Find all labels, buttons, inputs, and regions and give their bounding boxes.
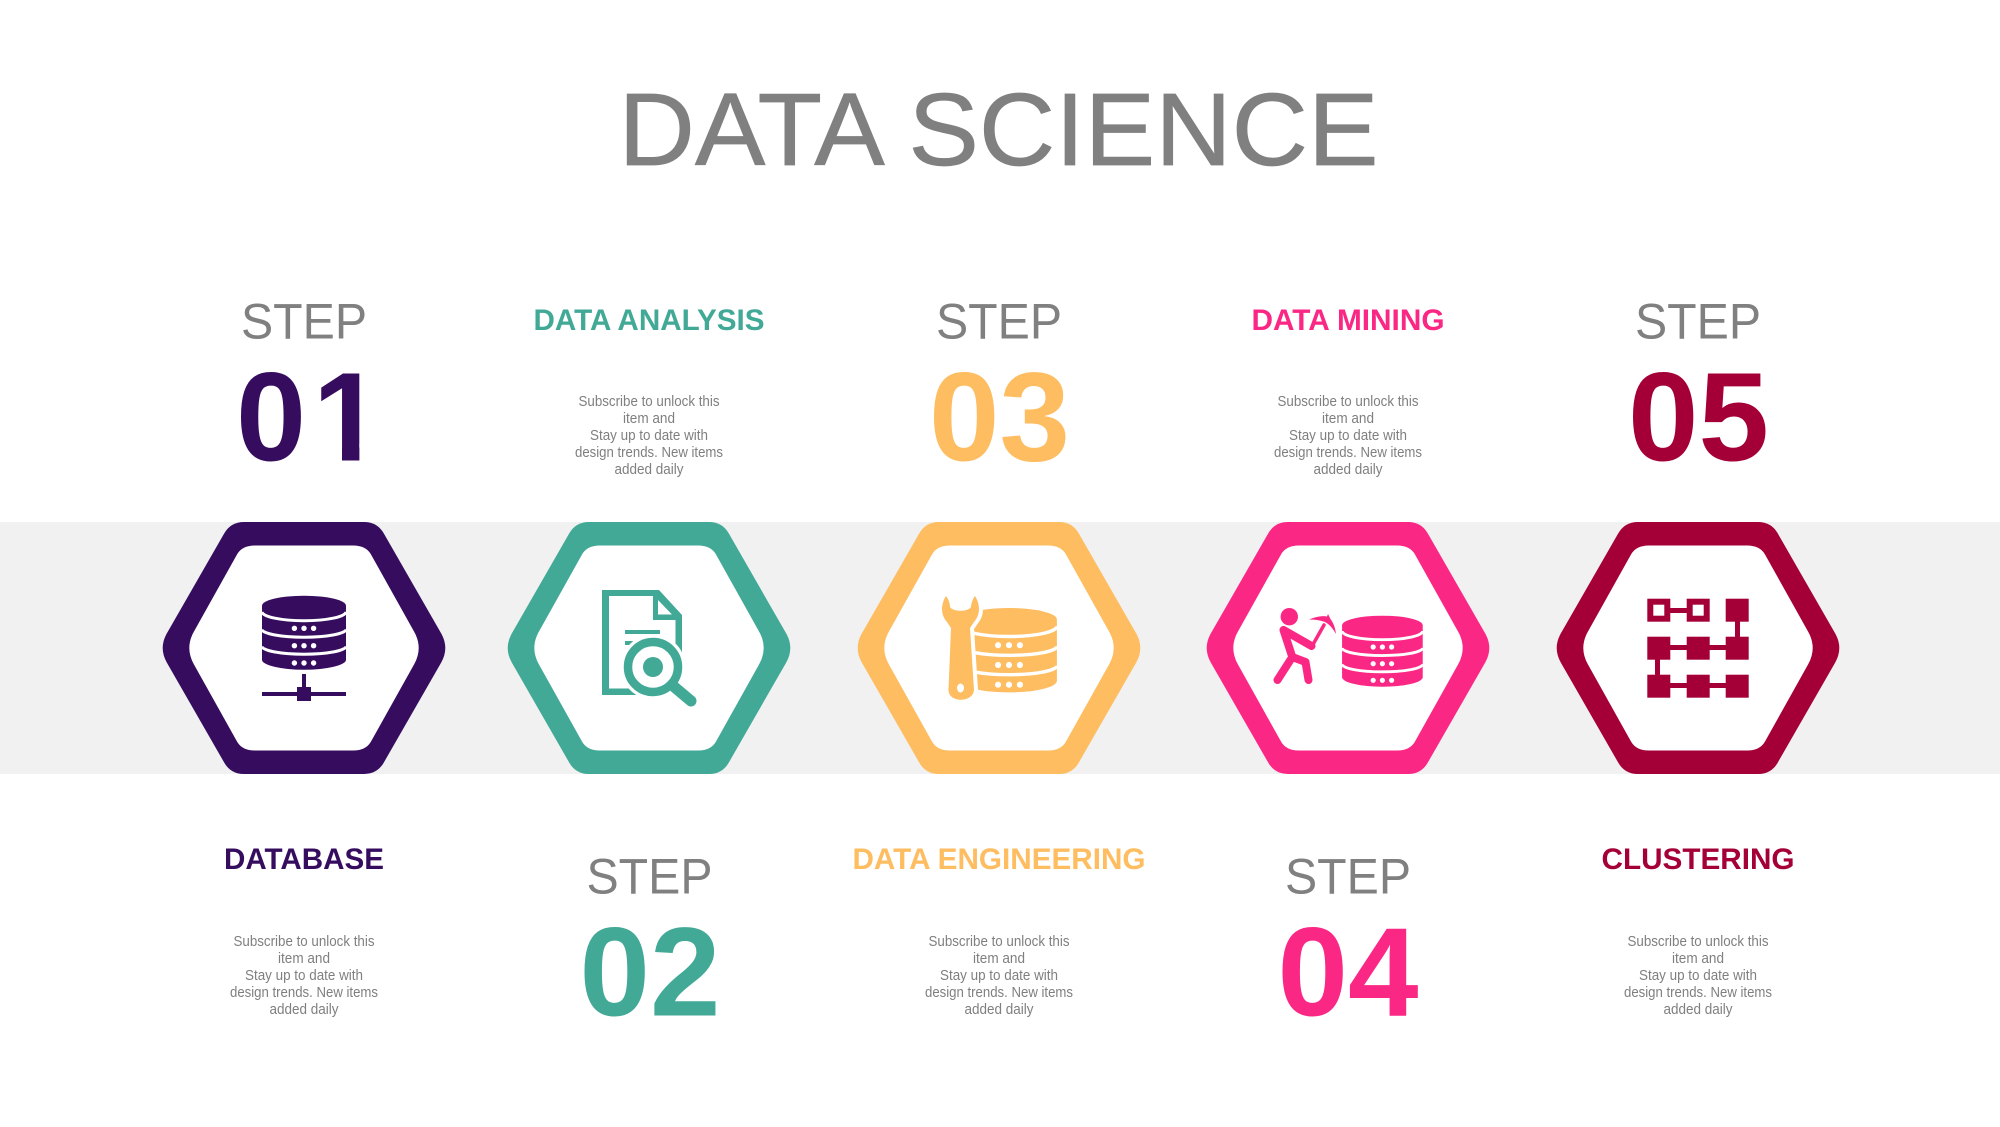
text block: data engineering: item and: [973, 950, 1025, 967]
text block: data engineering: design trends. New items: [925, 984, 1073, 1001]
icon: database network: [262, 596, 346, 701]
text block: clustering: design trends. New items: [1624, 984, 1772, 1001]
text block: data analysis: item and: [623, 410, 675, 427]
icon: document with magnifier: [602, 590, 691, 701]
text block: data mining: added daily: [1314, 461, 1383, 478]
text block: data mining: design trends. New items: [1274, 444, 1422, 461]
step label 05: STEP: [1635, 294, 1761, 350]
hexagon 1: [163, 522, 445, 774]
grey band: [0, 522, 2000, 774]
panel: step 03 data engineering: [852, 294, 1146, 1018]
step label 04: STEP: [1285, 848, 1411, 904]
text block: clustering: [1624, 933, 1772, 1018]
heading: data mining: DATA MINING: [1252, 304, 1444, 337]
step label 02: STEP: [586, 848, 712, 904]
text block: data mining: item and: [1322, 410, 1374, 427]
step number 01: 0: [236, 346, 306, 488]
text block: data engineering: [925, 933, 1073, 1018]
heading: data analysis: DATA ANALYSIS: [534, 304, 764, 337]
text block: data analysis: design trends. New items: [575, 444, 723, 461]
text block: data analysis: Subscribe to unlock this: [578, 393, 720, 410]
text block: data engineering: Subscribe to unlock this: [928, 933, 1070, 950]
text block: clustering: item and: [1672, 950, 1724, 967]
text block: data engineering: Stay up to date with: [940, 967, 1058, 984]
text block: database: added daily: [270, 1001, 339, 1018]
panel: step 02 data analysis: [508, 304, 790, 1042]
hexagon 4: [1207, 522, 1489, 774]
step number 04: 04: [1278, 902, 1418, 1042]
icon: wrench and database: [942, 596, 1057, 700]
text block: database: [230, 933, 378, 1018]
hexagon 2: [508, 522, 790, 774]
text block: data analysis: [575, 393, 723, 478]
step number 05: 05: [1628, 346, 1769, 488]
text block: data analysis: added daily: [614, 461, 684, 478]
hexagon 3: [858, 522, 1140, 774]
panel: step 01 database: [163, 294, 445, 1018]
text block: data mining: Subscribe to unlock this: [1278, 393, 1418, 410]
icon: clustering node grid: [1647, 599, 1749, 698]
heading: data engineering: DATA ENGINEERING: [852, 843, 1146, 876]
step number 03: 03: [929, 346, 1070, 488]
text block: database: design trends. New items: [230, 984, 378, 1001]
panel: step 04 data mining: [1207, 304, 1489, 1042]
panel: step 05 clustering: [1557, 294, 1839, 1018]
text block: clustering: Subscribe to unlock this: [1628, 933, 1768, 950]
step label 01: STEP: [241, 294, 367, 350]
text block: database: Subscribe to unlock this: [234, 933, 374, 950]
heading: clustering: CLUSTERING: [1602, 843, 1794, 876]
step label 03: STEP: [936, 294, 1062, 350]
text block: data analysis: Stay up to date with: [590, 427, 708, 444]
text block: data engineering: added daily: [964, 1001, 1034, 1018]
text block: data mining: [1274, 393, 1422, 478]
text block: database: Stay up to date with: [245, 967, 363, 984]
icon: miner with pickaxe and database: [1278, 608, 1423, 687]
text block: database: item and: [278, 950, 330, 967]
step number 02: 02: [580, 902, 720, 1042]
step number 01: 1: [313, 346, 383, 488]
hexagon 5: [1557, 522, 1839, 774]
title: DATA SCIENCE: [618, 72, 1378, 187]
text block: data mining: Stay up to date with: [1289, 427, 1407, 444]
text block: clustering: Stay up to date with: [1639, 967, 1757, 984]
heading: database: DATABASE: [224, 843, 384, 876]
text block: clustering: added daily: [1664, 1001, 1733, 1018]
